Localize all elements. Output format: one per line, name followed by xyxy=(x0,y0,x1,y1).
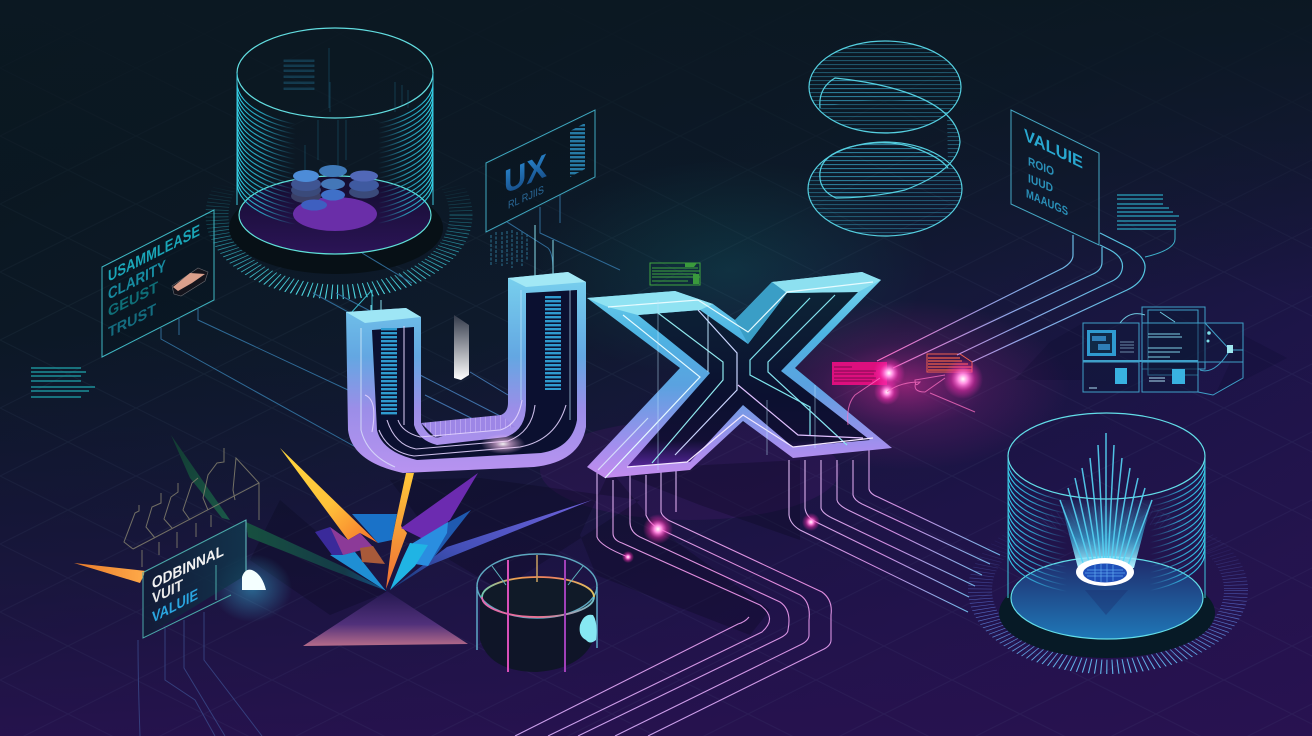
icon: coin stack xyxy=(291,165,379,210)
caps of X xyxy=(587,272,881,315)
UI screens cluster xyxy=(1015,307,1287,395)
side of X right arm xyxy=(735,282,787,344)
icon: glowing bell xyxy=(242,570,266,590)
image thumbnail xyxy=(1087,330,1116,356)
glowing wire dots xyxy=(622,513,820,563)
label: green tag xyxy=(650,263,700,285)
side text lines left xyxy=(31,368,95,397)
panel: value card: VALUIE xyxy=(1024,125,1083,173)
panel: ordinal value: VALUIE xyxy=(152,585,198,627)
white light bar xyxy=(454,315,469,380)
wires: left panels to U xyxy=(161,195,620,455)
caps of U xyxy=(346,308,421,323)
cluster: spiral coil xyxy=(808,41,962,236)
label: coral tag xyxy=(927,354,972,372)
panel: usability qualities: USAMMLEASE xyxy=(108,221,200,286)
panel: UX card xyxy=(486,110,595,268)
wires: value card to tags xyxy=(877,233,1145,368)
letter X xyxy=(587,272,892,478)
icon: cyan blob xyxy=(580,615,597,642)
panel: ordinal value: ODBINNAL xyxy=(152,542,224,593)
panel: value card xyxy=(1011,110,1099,245)
panel: UX card: UX xyxy=(504,147,547,202)
orange shard left xyxy=(74,563,146,583)
panel: usability qualities: TRUST xyxy=(108,301,156,342)
panel: usability qualities xyxy=(102,210,214,357)
cylinder: coin vault xyxy=(217,28,461,292)
panel: value card: IUUD xyxy=(1028,171,1053,195)
fence wireframe xyxy=(124,448,259,567)
side text lines right xyxy=(1117,195,1179,257)
wires under X xyxy=(515,450,1000,736)
panel: value card: ROIO xyxy=(1028,154,1054,179)
letter U xyxy=(346,272,586,473)
panel: usability qualities: GEUST xyxy=(108,279,158,321)
floor of U xyxy=(421,415,515,437)
triangle base xyxy=(303,591,468,646)
label: pink tag xyxy=(832,362,887,385)
icon: small device xyxy=(172,268,208,296)
panel: UX card: RL RJIIS xyxy=(508,184,544,212)
panel: value card: MAAUGS xyxy=(1026,187,1068,219)
ring cylinder xyxy=(477,554,597,672)
cylinder: light beam vault xyxy=(980,413,1236,667)
panel: usability qualities: CLARITY xyxy=(108,256,167,304)
panel: ordinal value: VUIT xyxy=(152,576,183,608)
glowing nodes xyxy=(848,357,983,425)
burst: shards xyxy=(171,435,592,646)
wires below ordinal panel xyxy=(138,612,262,736)
panel: ordinal value xyxy=(143,520,292,638)
light beam xyxy=(1060,433,1152,615)
